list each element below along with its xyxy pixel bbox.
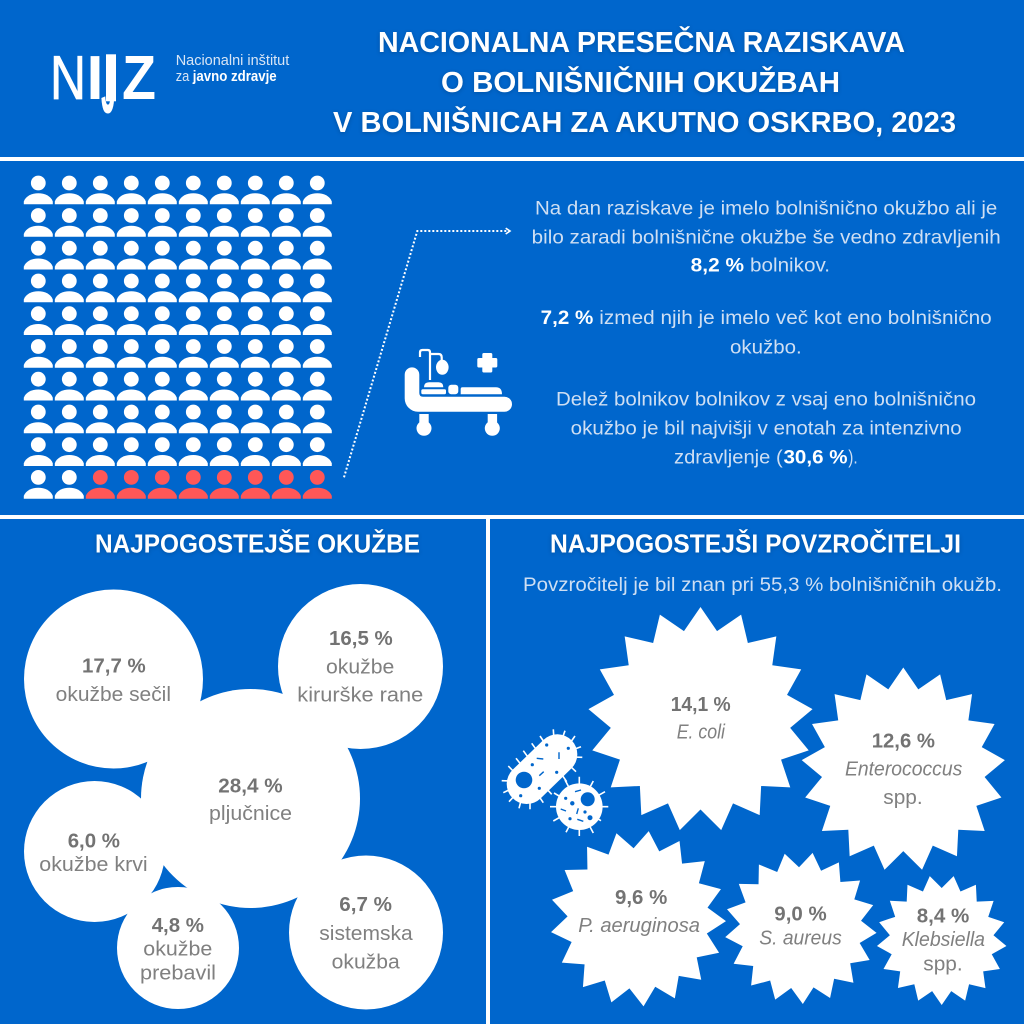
circle: pneumonia: pljučnice [209,802,292,825]
circle: surgical wound infections: 16,5 % [329,627,393,650]
logo: NIJZ: Z [122,44,156,113]
title: NACIONALNA PRESEČNA RAZISKAVA [378,25,905,59]
text block: key findings: ). [848,446,858,468]
circle: systemic infection: sistemska [319,922,413,945]
star: Klebsiella spp.: 8,4 % [917,904,969,927]
star: Enterococcus spp. [802,668,1005,870]
arrow: dotted leader [344,228,510,477]
circle: digestive infections: okužbe [143,938,212,961]
star: Klebsiella spp. [866,864,1017,1015]
star: E. coli: 14,1 % [671,693,731,716]
circle: digestive infections: 4,8 % [152,914,204,937]
circle: systemic infection: 6,7 % [339,893,392,916]
text block: key findings: 8,2 % [691,255,744,277]
text block: key findings: okužbo je bil najvišji v enotah za intenzivno [571,417,962,439]
subtitle: pathogen known: Povzročitelj je bil znan pri 55,3 % bolnišničnih okužb. [523,574,1002,596]
star: Klebsiella spp.: Klebsiella [902,928,985,951]
star: P. aeruginosa [540,820,736,1015]
text block: key findings: Na dan raziskave je imelo bolnišnično okužbo ali je [535,197,997,219]
circle: surgical wound infections: okužbe [326,655,394,678]
logo: NIJZ: za [176,69,190,85]
circle: blood infections: okužbe krvi [39,853,148,876]
star: S. aureus: 9,0 % [774,903,827,926]
text block: key findings: okužbo. [730,336,802,358]
logo: NIJZ [50,40,289,130]
star: S. aureus: S. aureus [759,926,842,949]
text block: key findings: izmed njih je imelo več kot eno bolnišnično [599,307,992,329]
star: E. coli [588,607,813,830]
star: S. aureus [714,841,887,1014]
circle: blood infections: 6,0 % [68,830,120,853]
circle: blood infections [24,781,165,922]
title: V BOLNIŠNICAH ZA AKUTNO OSKRBO, 2023 [333,105,956,139]
logo: NIJZ: Nacionalni inštitut [176,53,289,69]
circle: urinary infections [24,590,203,768]
text block: key findings: bolnikov. [750,255,830,277]
circle: urinary infections: okužbe sečil [56,683,171,706]
circle: urinary infections: 17,7 % [82,655,146,678]
title [333,25,956,139]
circle: surgical wound infections: kirurške rane [297,684,423,707]
panel: infection circles [24,584,443,1010]
star: Enterococcus spp.: spp. [883,786,923,809]
logo: NIJZ: N [50,44,86,113]
panel: pathogen stars [540,607,1017,1015]
logo: NIJZ: I [86,44,104,113]
star: P. aeruginosa: P. aeruginosa [578,914,700,937]
text block: key findings: bilo zaradi bolnišnične okužbe še vedno zdravljenih [532,226,1001,248]
pictogram: 100 patients, 8 highlighted [24,176,332,499]
circle: systemic infection: okužba [332,950,400,973]
icon: bacteria [502,729,608,836]
star: Klebsiella spp.: spp. [923,953,963,976]
text block: key findings: 7,2 % [541,307,593,329]
title: O BOLNIŠNIČNIH OKUŽBAH [441,65,840,99]
circle: systemic infection [289,856,443,1010]
circle: pneumonia [141,689,360,908]
star: E. coli: E. coli [677,720,726,743]
logo: NIJZ: J [101,40,116,130]
text block: key findings: Delež bolnikov bolnikov z vsaj eno bolnišnično [556,389,976,411]
circle: surgical wound infections [278,584,443,749]
heading: most common infections: NAJPOGOSTEJŠE OKUŽBE [95,528,420,558]
logo: NIJZ: javno zdravje [192,69,277,85]
circle: digestive infections: prebavil [140,961,216,984]
text block: key findings [532,197,1001,468]
text block: key findings: zdravljenje ( [674,446,783,468]
star: Enterococcus spp.: 12,6 % [872,729,935,752]
circle: digestive infections [117,887,239,1009]
text block: key findings: 30,6 % [784,446,848,468]
star: P. aeruginosa: 9,6 % [615,886,667,909]
star: Enterococcus spp.: Enterococcus [845,758,962,781]
icon: hospital bed [405,350,512,436]
circle: pneumonia: 28,4 % [218,774,283,797]
heading: most common pathogens: NAJPOGOSTEJŠI POVZROČITELJI [550,528,961,558]
